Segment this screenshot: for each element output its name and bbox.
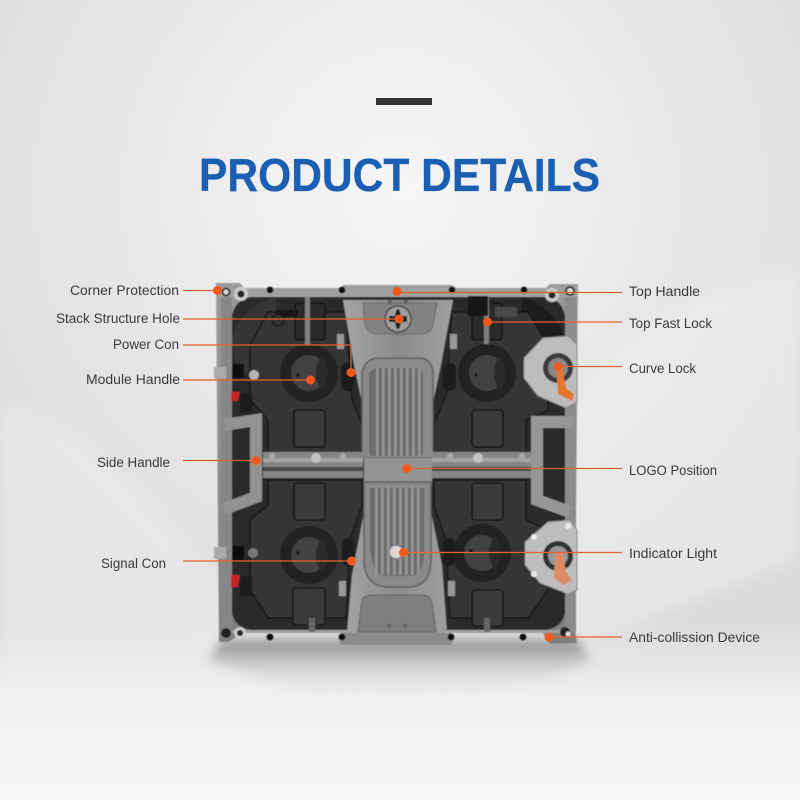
top recess bbox=[363, 303, 437, 334]
right side handle bbox=[537, 422, 573, 512]
labels: right column: Curve Lock bbox=[629, 361, 696, 376]
callout lines bbox=[183, 290, 622, 637]
module quadrants bbox=[250, 312, 548, 618]
labels: right column: Top Fast Lock bbox=[629, 316, 712, 331]
cabinet frame bbox=[216, 283, 578, 644]
bottom recess bbox=[358, 595, 436, 632]
labels: right column bbox=[629, 284, 760, 645]
upper fin panel bbox=[362, 358, 433, 458]
quadrant: top right bbox=[434, 312, 548, 455]
labels: right column: Anti-collission Device bbox=[629, 630, 760, 645]
rectangular recesses bbox=[293, 303, 503, 626]
logo plate bbox=[364, 458, 432, 486]
dark interior bbox=[231, 297, 566, 630]
side rails bbox=[221, 297, 232, 632]
corner hardware bbox=[221, 286, 575, 640]
left side latches bbox=[214, 364, 259, 596]
curve lock: bottom bbox=[525, 520, 577, 594]
lower fin panel bbox=[364, 482, 431, 587]
labels: right column: Indicator Light bbox=[629, 546, 717, 561]
central spine bbox=[343, 300, 453, 632]
labels: right column: LOGO Position bbox=[629, 463, 717, 478]
callout dots bbox=[213, 286, 562, 642]
labels: left column: Signal Con bbox=[101, 556, 166, 571]
power and signal connectors bbox=[337, 334, 457, 596]
labels: left column bbox=[56, 283, 180, 571]
quadrant: bottom left bbox=[250, 480, 362, 618]
left side handle bbox=[224, 420, 256, 509]
module handle recesses bbox=[280, 344, 516, 584]
title: PRODUCT DETAILS bbox=[199, 149, 600, 201]
product: LED cabinet rear bbox=[214, 283, 578, 645]
curve lock: top bbox=[524, 336, 577, 408]
labels: left column: Power Con bbox=[113, 337, 179, 352]
labels: left column: Stack Structure Hole bbox=[56, 311, 180, 326]
quadrant: top left bbox=[250, 312, 362, 455]
labels: right column: Top Handle bbox=[629, 284, 700, 299]
fast lock screws bbox=[272, 296, 517, 632]
labels: left column: Module Handle bbox=[86, 372, 180, 387]
labels: left column: Side Handle bbox=[97, 455, 170, 470]
labels: left column: Corner Protection bbox=[70, 283, 179, 298]
quadrant: bottom right bbox=[434, 480, 548, 618]
top accent bar bbox=[376, 98, 432, 105]
stack structure hole bbox=[385, 306, 411, 332]
horizontal cross bars bbox=[263, 452, 534, 478]
